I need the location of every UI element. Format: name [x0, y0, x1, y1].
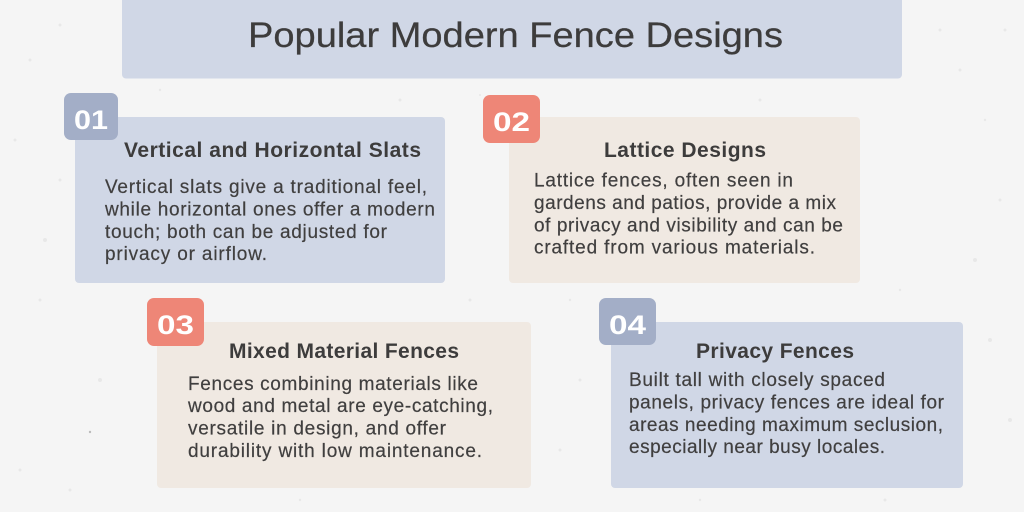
body text: privacy: especially near busy locales.: [629, 437, 885, 458]
body text: lattice: of privacy and visibility and can be: [534, 216, 843, 236]
body text: lattice: gardens and patios, provide a mix: [534, 193, 836, 214]
body text: mixed material: durability with low maintenance.: [188, 441, 482, 462]
body text: privacy: panels, privacy fences are ideal for: [629, 392, 945, 414]
heading: privacy fences: Privacy Fences: [696, 340, 854, 363]
body text: mixed material: Fences combining materials like: [188, 374, 478, 395]
heading: lattice designs: Lattice Designs: [604, 139, 766, 162]
badge 03: [147, 298, 204, 346]
badge 03: 03: [157, 310, 194, 340]
badge 02: [483, 95, 540, 143]
panel: mixed material fences: [147, 298, 531, 488]
heading: vertical and horizontal slats: Vertical and Horizontal Slats: [124, 139, 421, 162]
badge 01: 01: [74, 105, 108, 135]
body text: privacy: [629, 370, 945, 458]
body text: privacy: Built tall with closely spaced: [629, 370, 885, 391]
badge 02: 02: [493, 107, 530, 137]
panel: privacy fences: [599, 298, 963, 488]
body text: slats: while horizontal ones offer a modern: [104, 200, 435, 220]
body text: slats: touch; both can be adjusted for: [105, 222, 388, 243]
body text: privacy: areas needing maximum seclusion,: [629, 415, 943, 436]
body text: mixed material: [187, 374, 493, 462]
title banner: [122, 0, 902, 78]
badge 04: [599, 298, 656, 345]
title: Popular Modern Fence Designs: [248, 16, 783, 55]
body text: lattice: Lattice fences, often seen in: [534, 170, 793, 192]
badge 01: [64, 93, 118, 140]
body text: mixed material: wood and metal are eye-catching,: [187, 396, 493, 417]
body text: lattice: [534, 170, 843, 258]
body text: mixed material: versatile in design, and offer: [188, 418, 447, 440]
panel: lattice designs: [483, 95, 860, 283]
heading: mixed material fences: Mixed Material Fences: [229, 340, 459, 363]
body text: slats: [104, 177, 435, 265]
body text: lattice: crafted from various materials.: [534, 238, 815, 258]
body text: slats: privacy or airflow.: [105, 244, 267, 265]
panel: vertical and horizontal slats: [64, 93, 445, 283]
badge 04: 04: [609, 310, 646, 340]
body text: slats: Vertical slats give a traditional feel,: [105, 177, 427, 198]
